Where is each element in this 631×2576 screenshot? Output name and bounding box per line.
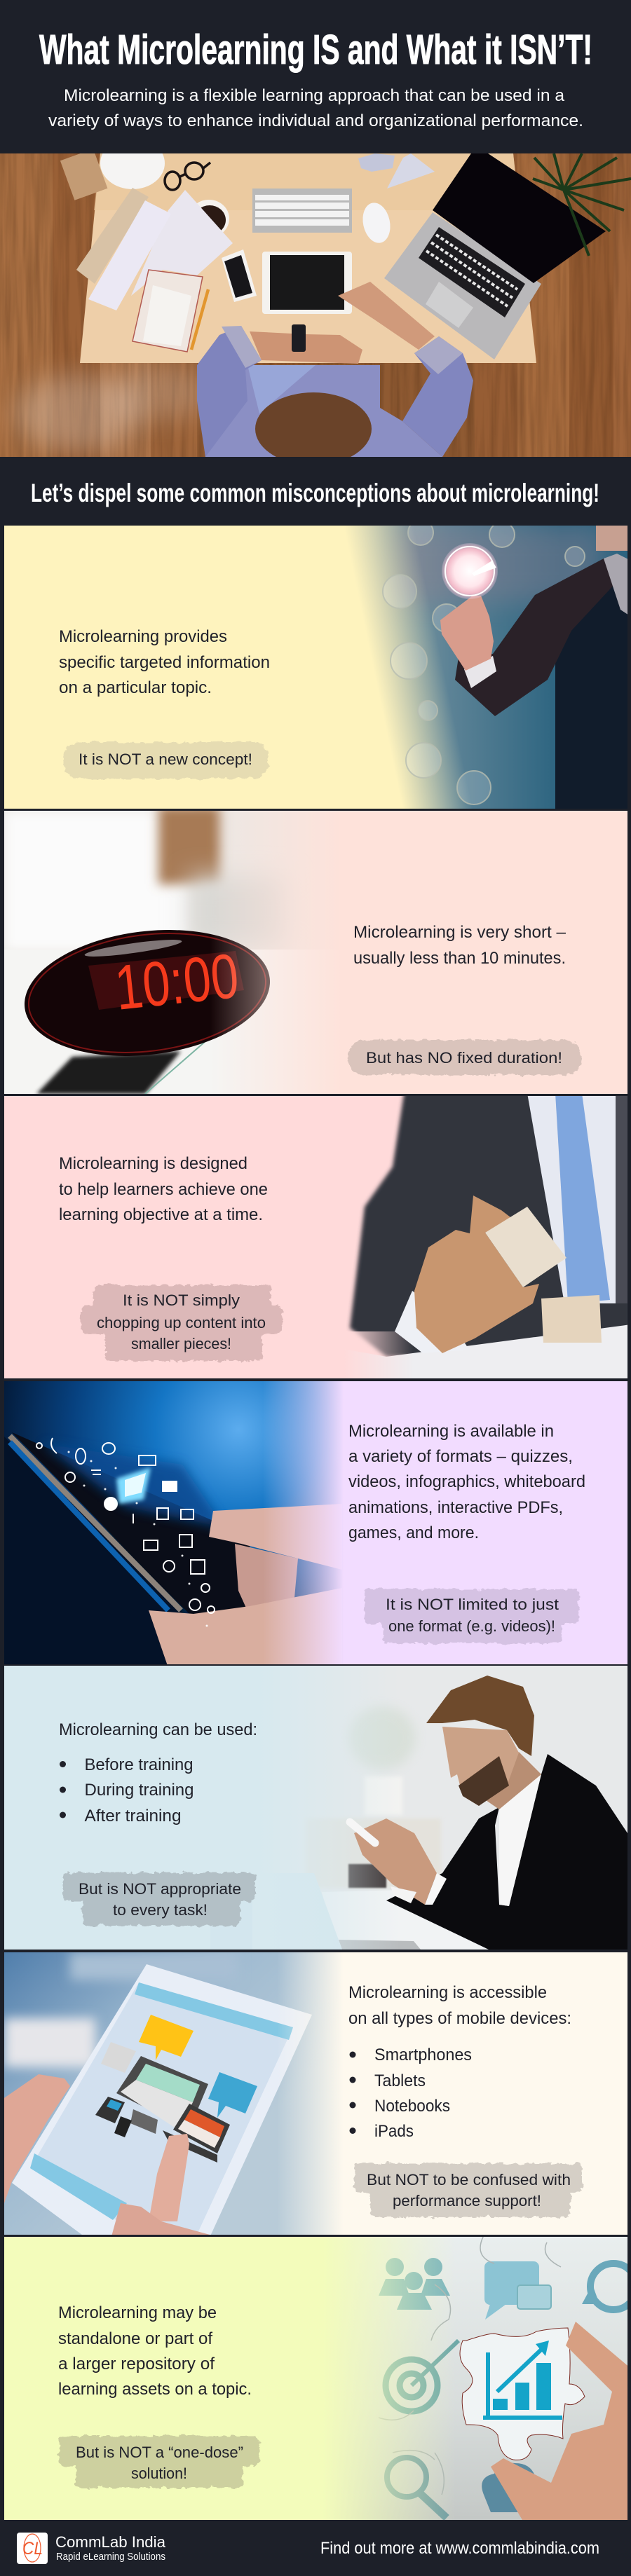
text [348,1983,571,2141]
callout: smaller pieces! [131,1335,231,1352]
callout [359,2168,577,2212]
glasses [165,163,210,190]
desk [80,153,536,363]
callout: It is NOT simply [123,1292,240,1309]
keyboard [252,189,352,233]
photo: tablet with flying icons [4,1381,372,1669]
text: to help learners achieve one [59,1180,268,1199]
phone [222,249,257,302]
devices illustration [139,2015,194,2060]
callout: to every task! [113,1901,208,1919]
panel 2: short duration [4,806,627,1097]
text: specific targeted information [59,653,270,672]
callout: It is NOT limited to just [386,1596,559,1613]
panel 7: standalone or part of a repository [4,2235,631,2520]
clock digits: 10:00 [111,941,242,1024]
text: a variety of formats – quizzes, [348,1447,573,1466]
text: a larger repository of [58,2355,215,2373]
text: Notebooks [374,2097,450,2116]
text: on all types of mobile devices: [348,2009,571,2028]
callout: But has NO fixed duration! [366,1049,562,1067]
intro text: variety of ways to enhance individual and organizational performance. [48,111,583,130]
callout: one format (e.g. videos)! [388,1617,555,1635]
fingers and palm [209,1504,342,1570]
crumpled paper and paper plane [358,153,395,172]
lamp [60,149,107,200]
coffee [197,200,229,233]
icons [36,1438,215,1613]
intro text [48,86,583,130]
text: Microlearning is very short – [353,923,566,942]
text: iPads [374,2122,414,2141]
text: usually less than 10 minutes. [353,949,566,968]
callout: But is NOT appropriate [79,1880,241,1898]
text: Smartphones [374,2046,472,2064]
text: animations, interactive PDFs, [348,1498,563,1517]
plant [533,153,631,256]
man: arms, shirt, hands, hair [197,365,442,457]
text: Microlearning is accessible [348,1983,547,2002]
text: Tablets [374,2071,426,2090]
text: Microlearning can be used: [59,1720,257,1739]
plans and rolls [131,190,233,296]
text: Microlearning is available in [348,1422,554,1441]
text: Microlearning is designed [59,1154,247,1173]
text: videos, infographics, whiteboard [348,1472,585,1491]
text: After training [84,1807,181,1825]
callout: But is NOT a “one-dose” [76,2444,243,2461]
laptop [384,212,541,359]
text: Before training [84,1755,194,1774]
text: games, and more. [348,1523,479,1542]
photo: businessman touching target [349,526,627,809]
text [59,1154,268,1224]
notebook and pencil [133,270,203,352]
icons on puzzle [379,2258,551,2320]
callout [64,742,269,779]
callout [369,1594,574,1638]
text [353,923,566,968]
footer [17,2533,599,2564]
puzzle piece with chart [460,2328,585,2460]
photo: hand holding a block [330,1090,631,1381]
photo: puzzle with icons [294,2235,631,2520]
text [348,1422,585,1542]
text: Microlearning may be [58,2303,217,2322]
text [59,1720,257,1825]
panel 1: targeted information [4,520,631,809]
callout: But NOT to be confused with [367,2171,571,2188]
panel 3: one objective [4,1090,631,1381]
callout [64,2441,255,2483]
callout: solution! [131,2465,187,2482]
mouse [363,203,390,243]
photo: alarm clock [4,811,301,1094]
text: standalone or part of [58,2329,212,2348]
company name [55,2533,166,2563]
hand [491,2322,631,2520]
text [59,627,270,697]
photo: man with smartphone [210,1666,631,1950]
text: learning objective at a time. [59,1205,263,1224]
hands [0,2074,70,2203]
panel 5: when to use [4,1666,631,1950]
callout: performance support! [393,2192,541,2210]
text: Microlearning provides [59,627,227,646]
text [58,2303,252,2399]
callout: chopping up content into [97,1314,266,1331]
panel 4: formats [4,1381,627,1669]
callout [348,1040,581,1075]
link text: Find out more at www.commlabindia.com [320,2539,599,2558]
text: learning assets on a topic. [58,2380,252,2399]
photo: tablet with devices illustration [0,1952,358,2239]
callout [68,1877,250,1921]
text: During training [84,1781,194,1800]
logo: CL [22,2539,43,2558]
hero photo: person at a desk from above [0,137,631,465]
callout [86,1290,277,1356]
text: on a particular topic. [59,678,212,697]
company name: Rapid eLearning Solutions [56,2551,165,2563]
logo [17,2533,48,2564]
intro text: Microlearning is a flexible learning approach that can be used in a [64,86,564,105]
callout: It is NOT a new concept! [79,751,252,768]
company name: CommLab India [55,2533,166,2551]
header: title and intro [39,27,592,130]
panel 6: mobile devices [0,1952,627,2239]
tablet [262,252,352,314]
